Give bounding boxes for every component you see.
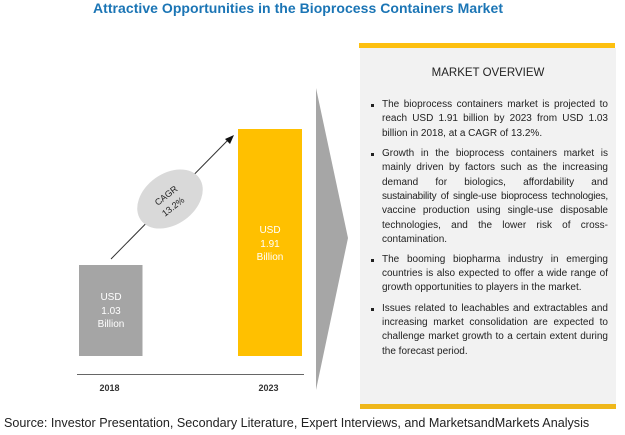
bullet 2: contamination.: [382, 234, 447, 245]
bullet 2: sustainability of single-use bioprocess technologies,: [382, 191, 608, 202]
bullet 2: technologies, and the lower risk of cross-: [382, 220, 608, 231]
panel heading: MARKET OVERVIEW: [432, 67, 544, 79]
bar: 2018: [79, 265, 142, 356]
CAGR ellipse: [126, 157, 214, 241]
bar label: 2023 value: Billion: [257, 252, 283, 263]
year label: 2023: 2023: [258, 383, 279, 393]
bar label: 2018 value: Billion: [98, 319, 124, 330]
bullet 2: vaccine production using single-use disposable: [382, 205, 608, 216]
CAGR label: CAGR: [153, 183, 180, 208]
bullet 1: reach USD 1.91 billion by 2023 from USD 1.03: [382, 113, 608, 124]
bullet 3: countries is also expected to offer a wide range of: [382, 268, 608, 279]
bullet 1: The bioprocess containers market is projected to: [382, 99, 608, 110]
growth chart: [77, 88, 348, 393]
bar label: 2023 value: [257, 225, 283, 263]
bar: 2023: [238, 129, 302, 356]
bullet 1: billion in 2018, at a CAGR of 13.2%.: [382, 128, 542, 139]
panel top bar: [358, 43, 615, 48]
panel bottom bar: [360, 404, 616, 409]
bar label: 2018 value: [98, 292, 124, 330]
bullet 4: increasing market consolidation are expected to: [382, 317, 608, 328]
bar label: 2023 value: 1.91: [260, 238, 280, 250]
bar label: 2018 value: 1.03: [101, 306, 121, 316]
CAGR label: [153, 183, 186, 218]
bullet 1: [371, 99, 608, 139]
bullet 2: demand for biologics, affordability and: [382, 177, 608, 188]
bullet 2: Growth in the bioprocess containers market is: [382, 148, 608, 159]
year label: 2018: 2018: [99, 383, 120, 393]
bullet 2: [371, 148, 608, 245]
CAGR label: 13.2%: [160, 195, 186, 218]
chart axis: [77, 374, 304, 376]
arrow: pointer to overview: [316, 88, 348, 390]
bullet 2: mainly driven by factors such as the increasing: [382, 162, 608, 173]
source note: Source: Investor Presentation, Secondary Literature, Expert Interviews, and MarketsandMarkets Analysis: [4, 416, 589, 430]
bullet 4: [371, 303, 608, 357]
bullet 4: challenge market growth to a certain extent during: [382, 331, 608, 342]
bullet 4: the forecast period.: [382, 346, 468, 357]
bullet 3: growth opportunities to players in the market.: [382, 282, 582, 293]
bar label: 2023 value: USD: [259, 225, 281, 236]
panel background: [360, 48, 616, 405]
growth arrow: [111, 135, 234, 259]
title: Attractive Opportunities in the Bioprocess Containers Market: [93, 0, 503, 16]
bar label: 2018 value: USD: [100, 292, 122, 303]
bullet 4: Issues related to leachables and extractables and: [382, 303, 608, 314]
bullet 3: [371, 254, 608, 293]
bullet 3: The booming biopharma industry in emerging: [382, 254, 608, 265]
